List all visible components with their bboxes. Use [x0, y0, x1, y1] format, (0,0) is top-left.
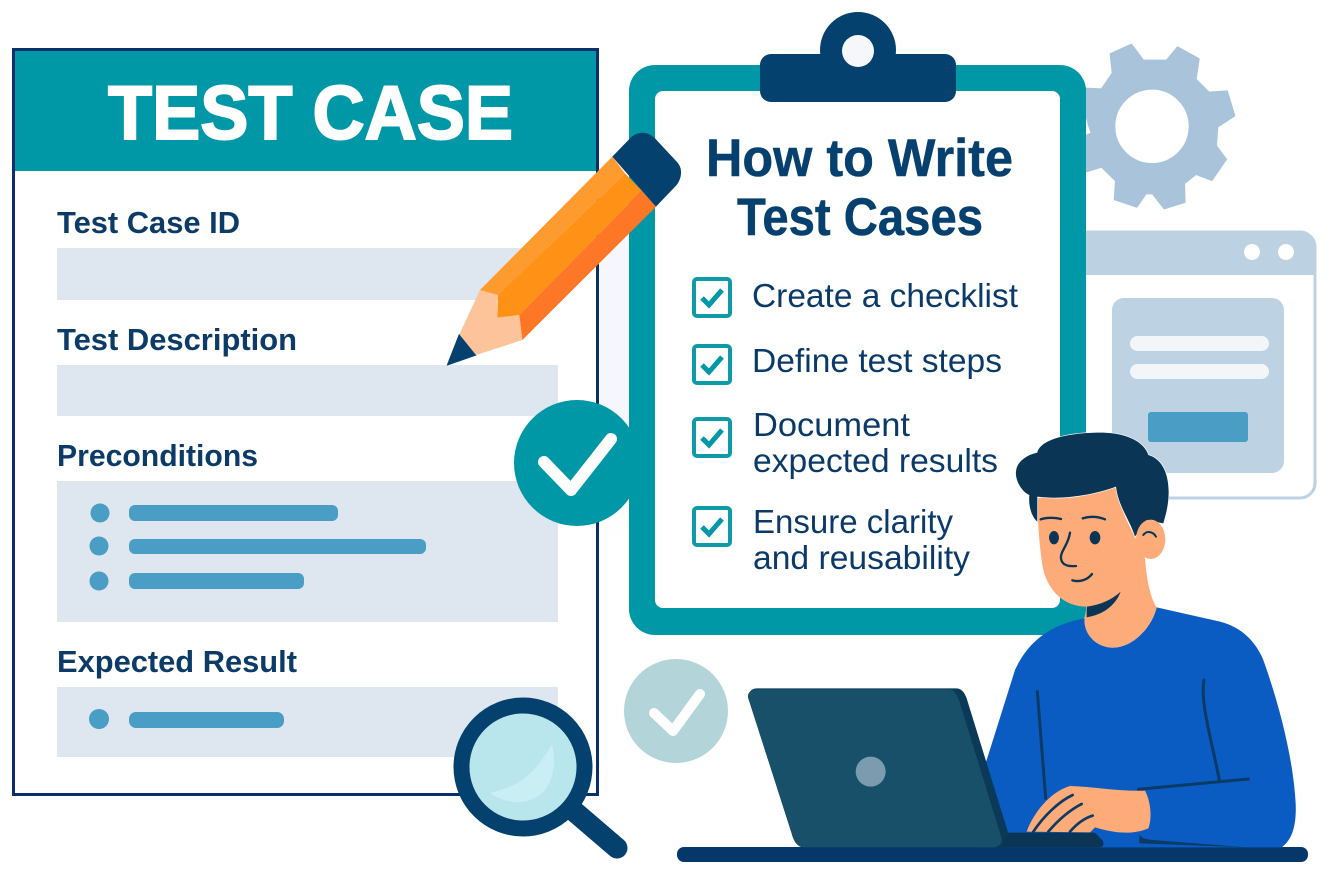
heading: how to write test cases: Test Cases: [737, 188, 983, 247]
panel: clipboard: [629, 12, 1086, 635]
field: test description: Test Description: [57, 323, 297, 357]
clipboard clip: [760, 12, 956, 102]
checklist item: create a checklist: Create a checklist: [752, 277, 1018, 314]
checklist item: document expected results: expected results: [753, 442, 998, 479]
heading: how to write test cases: How to Write: [706, 129, 1013, 188]
checklist item: document expected results: Document: [753, 406, 910, 443]
field: test case id: [57, 206, 558, 300]
icon: magnifying glass: [462, 706, 617, 848]
person: [980, 433, 1296, 847]
panel: test case form: [14, 50, 598, 794]
field: expected result: Expected Result: [57, 645, 297, 679]
field: test case id: Test Case ID: [57, 206, 240, 240]
illustration: person at laptop: [748, 433, 1296, 847]
icon: gear: [1080, 45, 1234, 208]
icon: check badge: [514, 400, 640, 526]
decorative pale strip: [600, 200, 632, 540]
form header: TEST CASE: [108, 71, 513, 156]
checklist item: define test steps: Define test steps: [752, 342, 1002, 379]
checklist item: document expected results: [694, 406, 998, 479]
form header: [15, 51, 596, 171]
checklist item: ensure clarity and reusability: [694, 503, 971, 576]
icon: browser window: [1070, 231, 1315, 498]
field: preconditions: Preconditions: [57, 439, 258, 473]
field: test description: [57, 323, 558, 416]
laptop: [748, 688, 1103, 847]
heading: how to write test cases: [706, 129, 1013, 247]
field: preconditions: [57, 439, 558, 622]
checklist item: ensure clarity and reusability: Ensure clarity: [753, 503, 953, 540]
icon: faded check badge: [624, 659, 728, 763]
field: expected result: [57, 645, 558, 757]
desk: [677, 847, 1308, 862]
icon: pencil: [447, 133, 681, 365]
checklist item: ensure clarity and reusability: and reusability: [753, 539, 971, 576]
